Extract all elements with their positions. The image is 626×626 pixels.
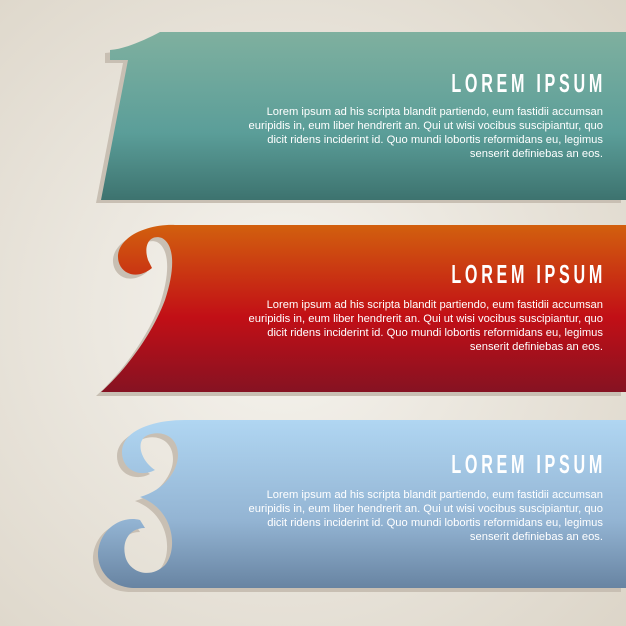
heading 1: LOREM IPSUM [451,68,606,98]
body text 1 [249,106,603,160]
body text 3: Lorem ipsum ad his scripta blandit partiendo, eum fastidii accumsan [267,489,603,501]
body text 3 [249,489,603,543]
panel 2: red banner shaped as number 2 [96,225,626,396]
panel 3: blue banner shaped as number 3 [93,420,626,592]
body text 1: senserit definiebas an eos. [470,148,603,160]
body text 2: senserit definiebas an eos. [470,341,603,353]
body text 2 [249,299,603,353]
heading 2: LOREM IPSUM [451,259,606,289]
heading 3: LOREM IPSUM [451,449,606,479]
body text 2: Lorem ipsum ad his scripta blandit partiendo, eum fastidii accumsan [267,299,603,311]
body text 3: euripidis in, eum liber hendrerit an. Qui ut wisi vocibus suscipiantur, quo [249,503,603,515]
panel 1: teal banner shaped as number 1 [96,32,626,203]
body text 2: dicit ridens inciderint id. Quo mundi lobortis reformidans eu, legimus [267,327,603,339]
body text 1: dicit ridens inciderint id. Quo mundi lobortis reformidans eu, legimus [267,134,603,146]
body text 2: euripidis in, eum liber hendrerit an. Qui ut wisi vocibus suscipiantur, quo [249,313,603,325]
body text 3: senserit definiebas an eos. [470,531,603,543]
body text 1: Lorem ipsum ad his scripta blandit partiendo, eum fastidii accumsan [267,106,603,118]
body text 1: euripidis in, eum liber hendrerit an. Qui ut wisi vocibus suscipiantur, quo [249,120,603,132]
body text 3: dicit ridens inciderint id. Quo mundi lobortis reformidans eu, legimus [267,517,603,529]
